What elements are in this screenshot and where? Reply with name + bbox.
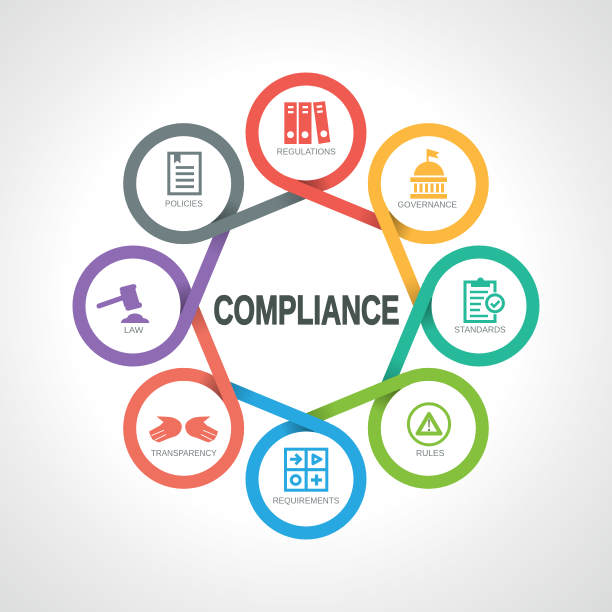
label: standards: STANDARDS [454, 324, 506, 334]
label: governance: GOVERNANCE [398, 200, 457, 210]
label: regulations: REGULATIONS [277, 147, 336, 157]
icon: gavel [99, 284, 149, 323]
rules ring [306, 325, 505, 524]
label: transparency: TRANSPARENCY [151, 448, 217, 458]
label: requirements: REQUIREMENTS [273, 496, 340, 506]
regulations ring [252, 79, 387, 225]
transparency ring [88, 306, 287, 505]
icon: binders [284, 101, 330, 144]
standards ring [387, 252, 533, 387]
icon: open hands [149, 416, 218, 442]
requirements ring [225, 387, 360, 533]
icon: document [169, 152, 200, 194]
title: COMPLIANCE [214, 287, 400, 333]
governance ring [325, 107, 524, 306]
label: law: LAW [124, 325, 144, 335]
label: policies: POLICIES [165, 199, 203, 209]
icon: requirements grid [284, 448, 328, 492]
label: rules: RULES [416, 448, 445, 458]
icon: clipboard with check [465, 278, 506, 322]
law ring [79, 225, 225, 360]
policies ribbon tail end [260, 178, 306, 224]
icon: warning triangle [408, 404, 450, 445]
policies ring [107, 107, 274, 274]
icon: capitol building [410, 149, 447, 199]
